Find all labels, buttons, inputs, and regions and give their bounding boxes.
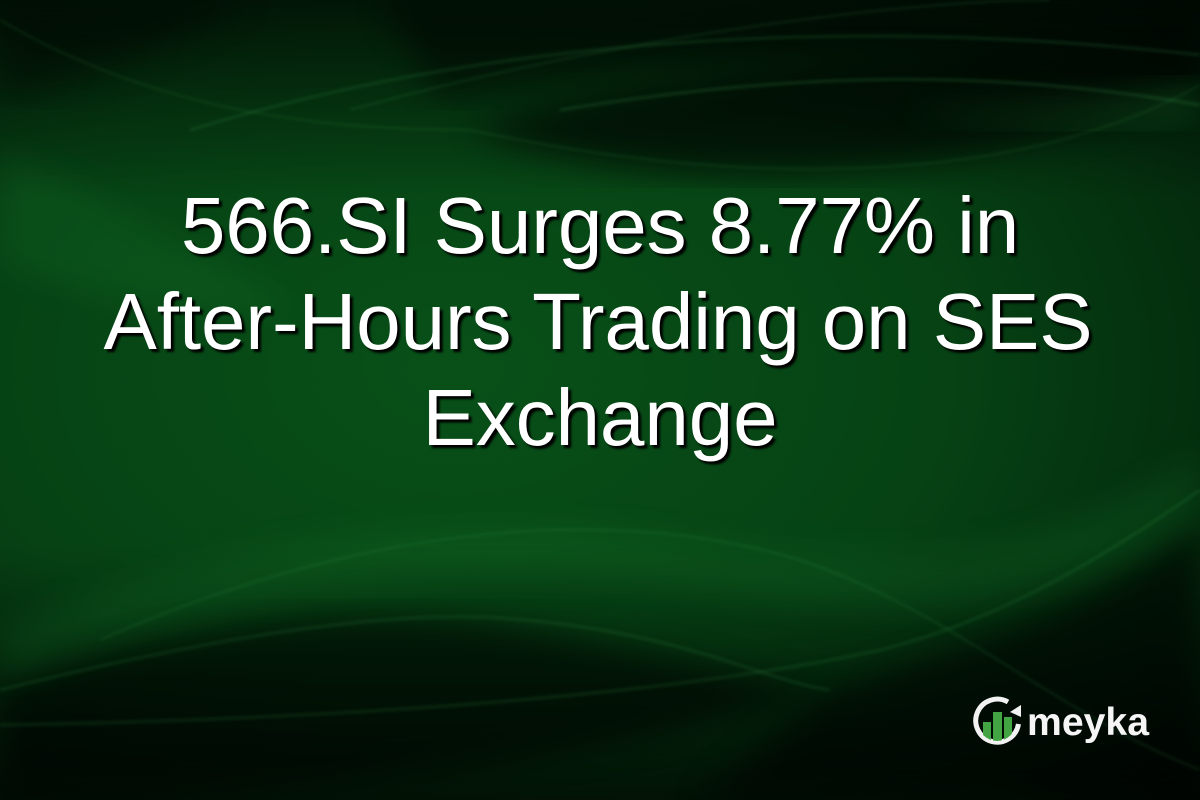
title: 566.SI Surges 8.77% in: [181, 181, 1019, 270]
wordmark: meyka: [1027, 701, 1149, 744]
title: Exchange: [422, 373, 778, 462]
title: [104, 181, 1093, 466]
title: After-Hours Trading on SES: [104, 277, 1092, 366]
logo: meyka: [973, 696, 1150, 745]
icon: circular arrow with bars: [976, 699, 1021, 744]
